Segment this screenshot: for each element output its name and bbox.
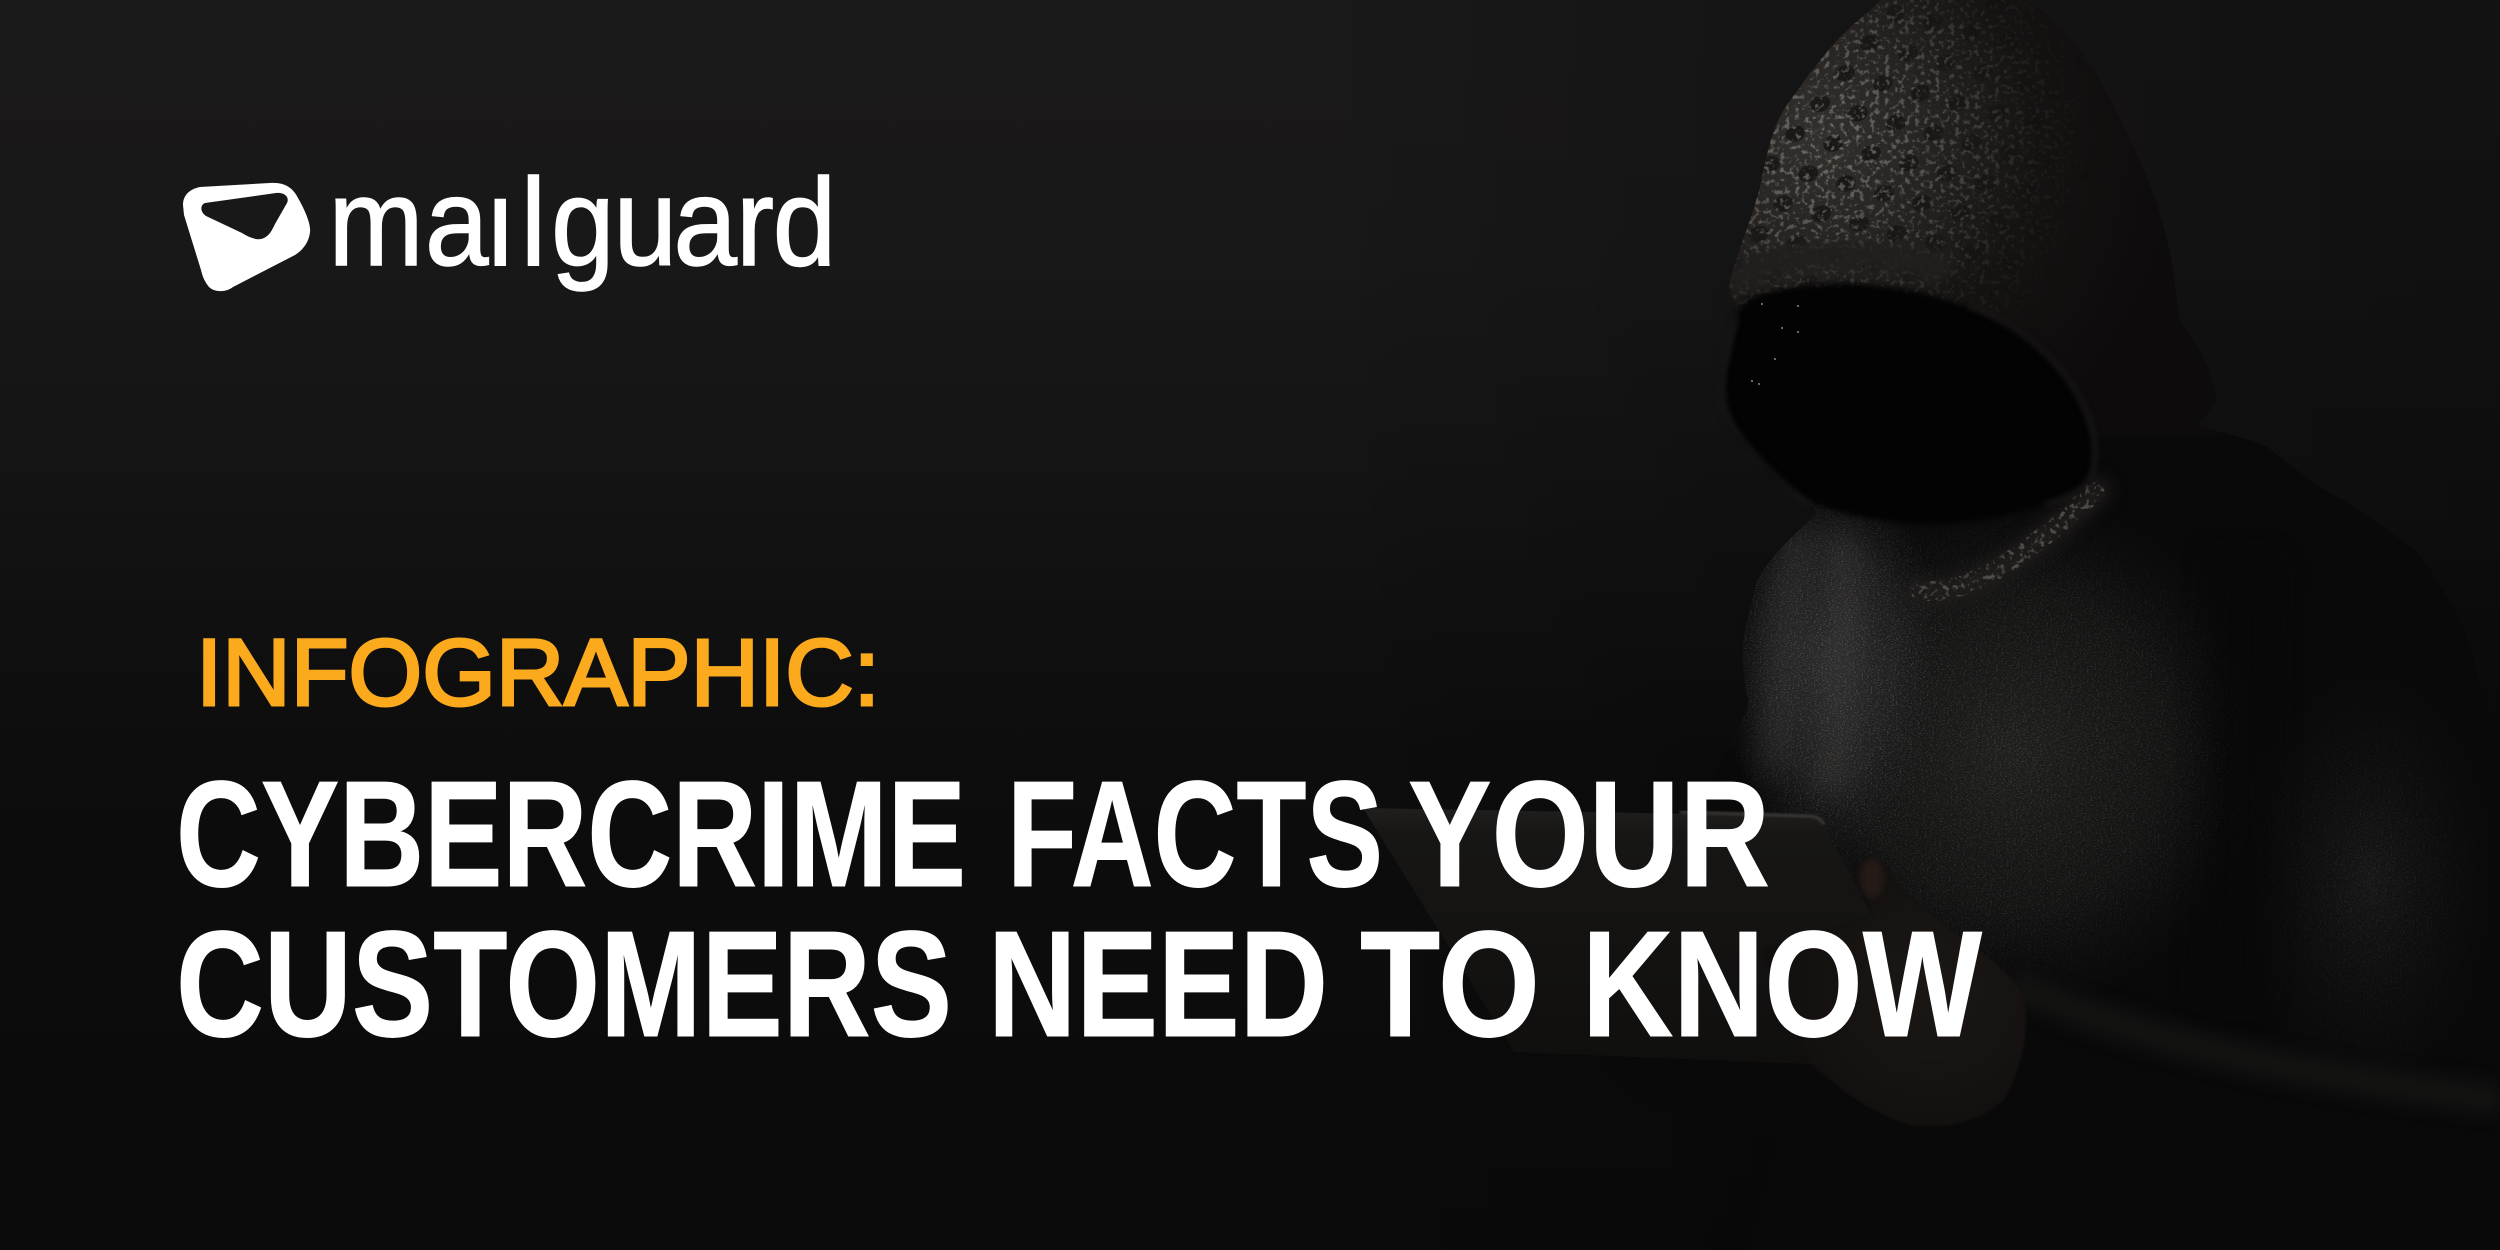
hood right rim highlight [1970,306,2095,505]
hooded hacker figure photo [1364,0,2496,1126]
specks inside the hood [1751,303,1799,385]
subheading: infographic: INFOGRAPHIC: [196,620,880,726]
title line 2: TO [1360,899,1540,1068]
title line 2: KNOW [1582,899,1982,1068]
title line 1: CYBERCRIME [176,749,966,918]
sweater highlights and knit [1732,502,2490,1104]
hand holding tablet [1760,857,2026,1126]
title line 1: FACTS [1007,749,1383,918]
sweater neck cowl [1908,480,2108,604]
title line 1: YOUR [1408,749,1770,918]
logo wordmark: mailguard [328,154,836,292]
title [176,749,1982,1068]
title line 1 [176,749,1770,918]
figure silhouette [1600,0,2500,1250]
logo: mailguard [183,154,836,292]
hood face opening [1726,283,2094,524]
logo icon: envelope shield [183,183,310,291]
knitted hood [1729,0,2090,322]
hood left chin rim [1721,318,1810,506]
title line 2: NEED [988,899,1328,1068]
title line 2 [176,899,1982,1068]
title line 2: CUSTOMERS [176,899,952,1068]
tablet [1363,808,1900,1064]
